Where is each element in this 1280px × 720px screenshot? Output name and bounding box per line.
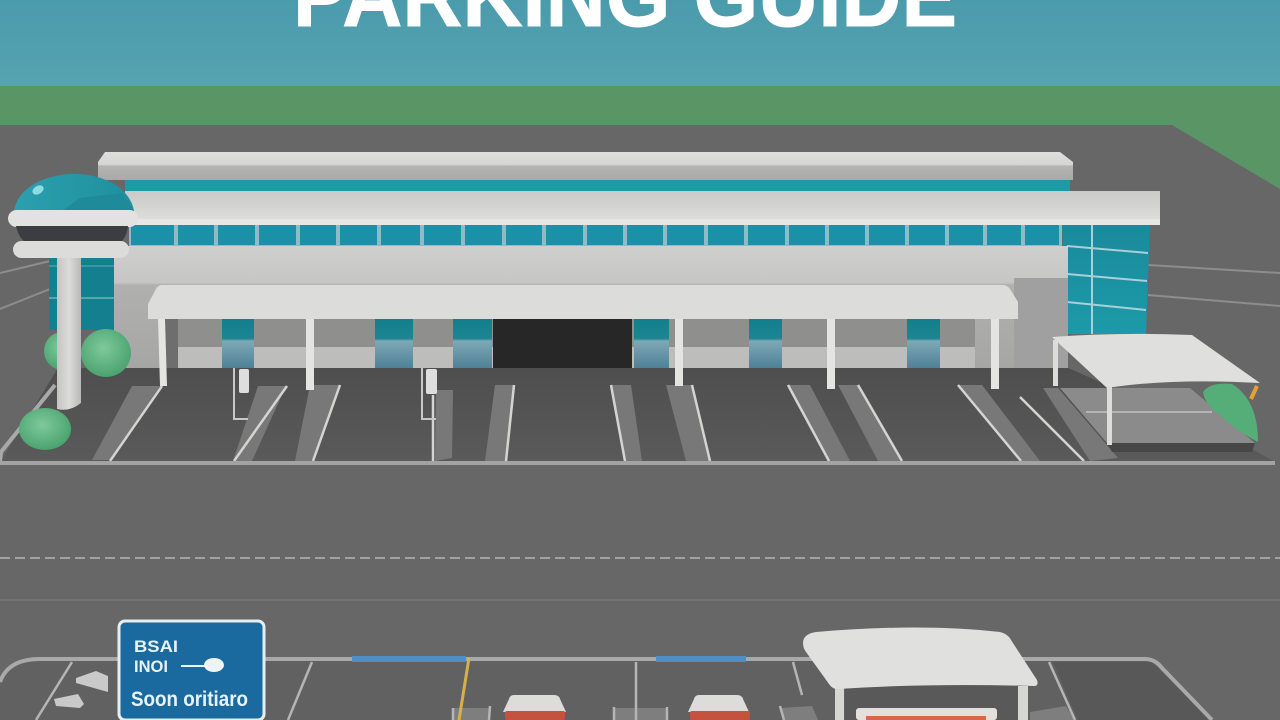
yellow divider <box>459 658 469 720</box>
bush <box>1203 384 1258 442</box>
stall lines <box>36 662 1075 720</box>
apron bottom curb <box>0 461 1275 465</box>
terminal building <box>98 152 1160 369</box>
grass corner <box>1172 125 1280 189</box>
dark entrance <box>493 319 632 369</box>
pad marking <box>1086 411 1212 413</box>
dark observation deck <box>16 226 128 245</box>
right glass wing <box>1062 224 1150 334</box>
sign text line 1: BSAI <box>134 637 178 656</box>
parking apron <box>0 368 1275 462</box>
blue bays <box>352 656 746 662</box>
right lot dark stall <box>1053 662 1212 720</box>
sign text line 3: Soon oritiaro <box>131 688 248 711</box>
entrance facade <box>165 319 975 368</box>
road centre dashes <box>0 557 1280 559</box>
control tower <box>8 174 138 450</box>
lot surface <box>0 661 1212 720</box>
window strip <box>129 224 1062 246</box>
lower ring <box>13 241 129 258</box>
parking islands <box>92 385 1118 461</box>
red car right <box>688 695 750 720</box>
grass band <box>0 86 1280 126</box>
side carport <box>1052 334 1260 452</box>
bush front <box>19 408 71 450</box>
canopy roof <box>803 628 1038 689</box>
side fence lines <box>0 261 1280 309</box>
lot outline <box>0 659 1212 720</box>
tower pole <box>57 255 81 410</box>
small white arrows <box>54 671 108 708</box>
pad shadow <box>1107 443 1255 452</box>
orange marker <box>1251 386 1257 399</box>
dome <box>14 174 134 211</box>
sky band <box>0 0 1280 86</box>
road sign <box>119 621 264 720</box>
road faint line <box>0 599 1280 601</box>
canopy posts <box>835 686 1028 720</box>
dark bay under canopy <box>845 686 1018 720</box>
lower parking lot <box>0 656 1212 720</box>
upper ring <box>8 210 138 227</box>
wall shade pier <box>1014 278 1068 368</box>
carport roof <box>1052 334 1260 388</box>
canopy posts <box>158 319 999 390</box>
tower glass backdrop <box>49 255 114 330</box>
main wall <box>114 246 1068 368</box>
ticket kiosks <box>234 368 437 419</box>
main canopy <box>148 285 1018 390</box>
carport pad <box>1060 388 1255 443</box>
lower canopy <box>803 628 1038 720</box>
carport posts <box>1053 340 1112 445</box>
glass doors <box>222 319 940 368</box>
sign arrow <box>181 658 224 672</box>
upper roof <box>98 152 1073 180</box>
bushes behind tower <box>44 329 131 377</box>
stall stops <box>453 706 1074 720</box>
parking stall lines <box>110 385 1084 461</box>
red car left <box>503 695 566 720</box>
lower roof <box>125 191 1160 225</box>
sign text line 2: INOI <box>134 657 168 676</box>
vehicle under canopy <box>856 708 997 720</box>
left curb <box>0 385 55 462</box>
teal clerestory band <box>125 180 1070 191</box>
